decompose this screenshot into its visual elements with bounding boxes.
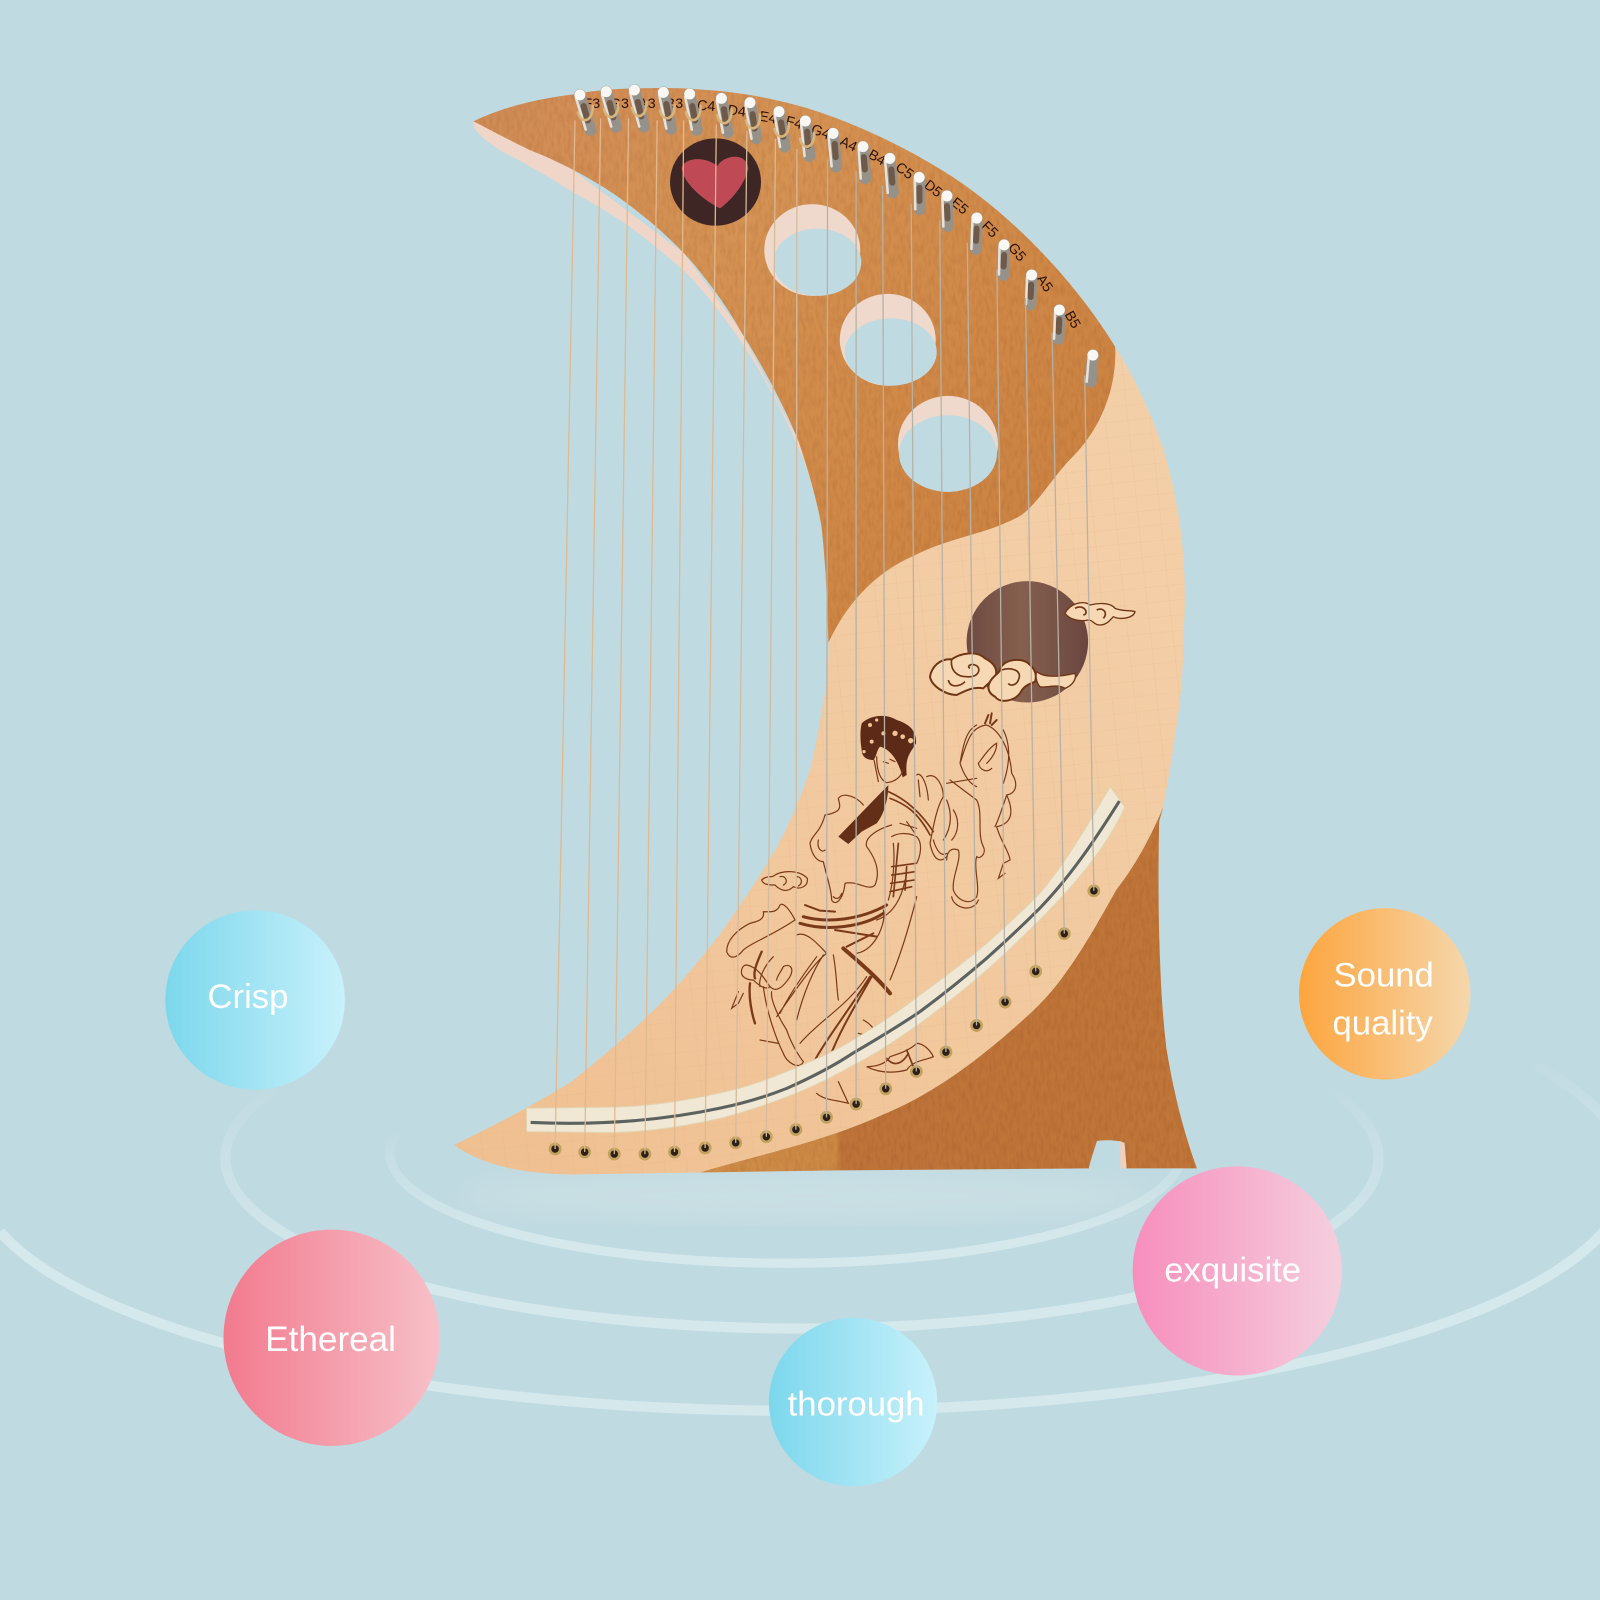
left sleeve xyxy=(810,795,892,903)
engraved lady lower figure xyxy=(727,880,933,1103)
note labels: F4 xyxy=(784,113,804,133)
note labels: B5 xyxy=(1061,308,1083,331)
bubble: thorough: thorough xyxy=(788,1385,925,1423)
maple body xyxy=(454,347,1185,1174)
hair xyxy=(860,716,916,777)
strings xyxy=(555,118,1094,1154)
harp reflection xyxy=(459,1171,1153,1220)
bubble: Sound quality xyxy=(1299,908,1470,1080)
ripple rings xyxy=(0,988,1600,1411)
note labels: D5 xyxy=(921,177,945,201)
note labels: C5 xyxy=(892,159,916,183)
bubble: Ethereal xyxy=(223,1230,440,1446)
harp arm inner edge xyxy=(473,121,829,526)
centre folds xyxy=(777,934,867,1043)
bubble: Ethereal: Ethereal xyxy=(265,1320,396,1359)
small cloud xyxy=(762,872,807,890)
bubble: exquisite: exquisite xyxy=(1164,1252,1301,1290)
note labels: E4 xyxy=(758,109,778,128)
bubble: Sound quality: Sound xyxy=(1334,957,1434,995)
bridge metal rod xyxy=(531,801,1119,1123)
maple grain xyxy=(454,347,1185,1174)
sound hole 2 xyxy=(840,294,937,386)
bubble: Crisp xyxy=(165,910,345,1090)
right skirt xyxy=(857,880,917,980)
bubble: Sound quality: quality xyxy=(1333,1005,1433,1043)
belt panel xyxy=(890,843,916,897)
face xyxy=(874,757,903,783)
note labels: A5 xyxy=(1033,272,1056,295)
sound hole 3 xyxy=(898,396,998,492)
string anchor eyelets xyxy=(550,886,1099,1159)
belt xyxy=(800,905,887,927)
tuning pegs xyxy=(574,84,1098,382)
harp xyxy=(454,84,1197,1174)
torso xyxy=(888,822,921,900)
note labels: G5 xyxy=(1004,240,1029,265)
notch inner face xyxy=(1119,1141,1127,1168)
note labels: B3 xyxy=(666,96,683,112)
robe collar xyxy=(888,792,933,835)
long fold xyxy=(760,957,803,1065)
note labels: G4 xyxy=(809,122,832,143)
dark sleeve xyxy=(838,785,888,844)
engraved moon and clouds xyxy=(930,581,1135,703)
engraved lady upper figure xyxy=(762,713,1016,908)
bubble: Crisp: Crisp xyxy=(207,978,288,1016)
mahogany arm xyxy=(473,88,1115,643)
hem and lower cloud xyxy=(817,1020,933,1103)
sash curl xyxy=(741,965,770,988)
left drape xyxy=(727,904,795,957)
note labels: G3 xyxy=(610,96,629,112)
bubble: exquisite xyxy=(1133,1166,1342,1376)
hair flowers xyxy=(862,718,913,753)
heart inlay xyxy=(670,138,761,226)
note labels: F3 xyxy=(584,96,600,112)
bridge xyxy=(527,787,1125,1133)
bubble: thorough xyxy=(769,1318,937,1486)
note labels: A3 xyxy=(638,96,656,112)
note labels: A4 xyxy=(837,134,859,156)
note labels: F5 xyxy=(978,218,1001,241)
hands and sleeve xyxy=(917,774,947,860)
note labels: D4 xyxy=(727,102,747,121)
note labels: B4 xyxy=(865,147,888,169)
note labels: C4 xyxy=(696,98,716,115)
raised ribbon xyxy=(960,725,1016,878)
note labels xyxy=(584,96,1083,331)
sound hole 1 xyxy=(764,204,861,296)
mahogany base xyxy=(700,807,1197,1172)
ribbon spikes xyxy=(985,713,997,725)
note labels: E5 xyxy=(948,195,971,218)
